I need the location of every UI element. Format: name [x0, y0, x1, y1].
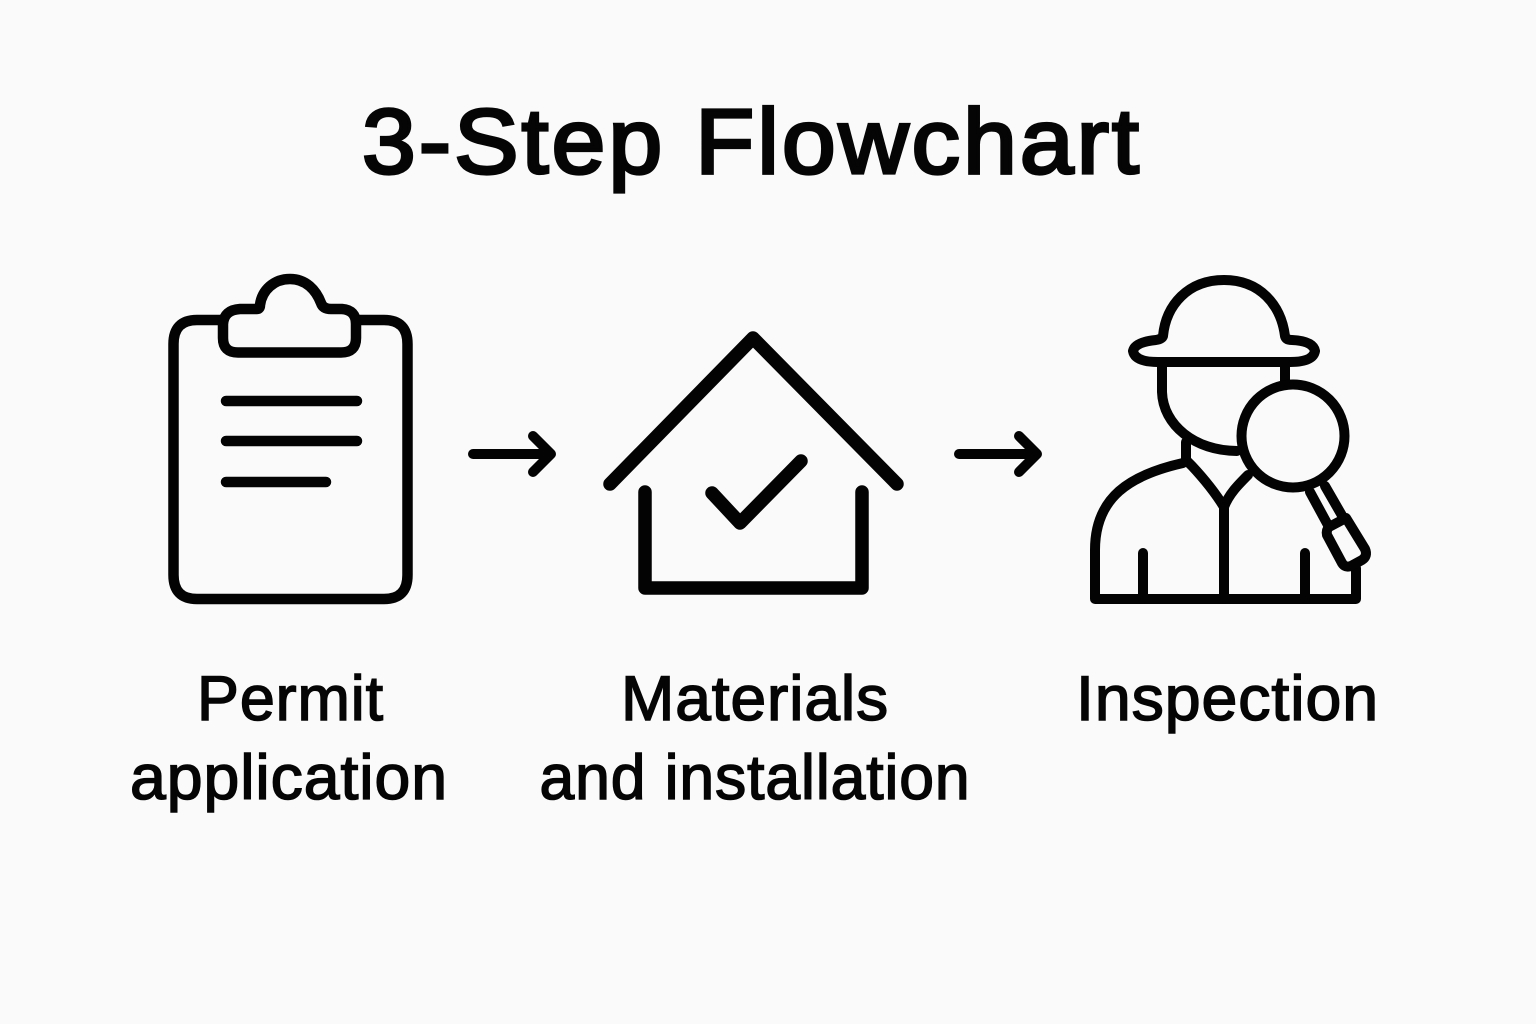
icon: inspector with magnifying glass: [1095, 280, 1366, 599]
label: Inspection: Inspection: [1076, 664, 1379, 734]
label: Materials and installation: [540, 664, 970, 813]
label: Permit application: application: [130, 743, 448, 813]
arrow: step 2 to step 3: [959, 436, 1037, 472]
label: Materials and installation: Materials: [621, 664, 889, 734]
icon: house with check mark: [610, 338, 897, 588]
label: Permit application: Permit: [197, 664, 384, 734]
arrow: step 1 to step 2: [473, 436, 551, 472]
label: Materials and installation: and installation: [540, 743, 970, 813]
icon: clipboard: [174, 279, 408, 599]
label: Permit application: [130, 664, 448, 813]
title: 3-Step Flowchart: [362, 91, 1142, 193]
